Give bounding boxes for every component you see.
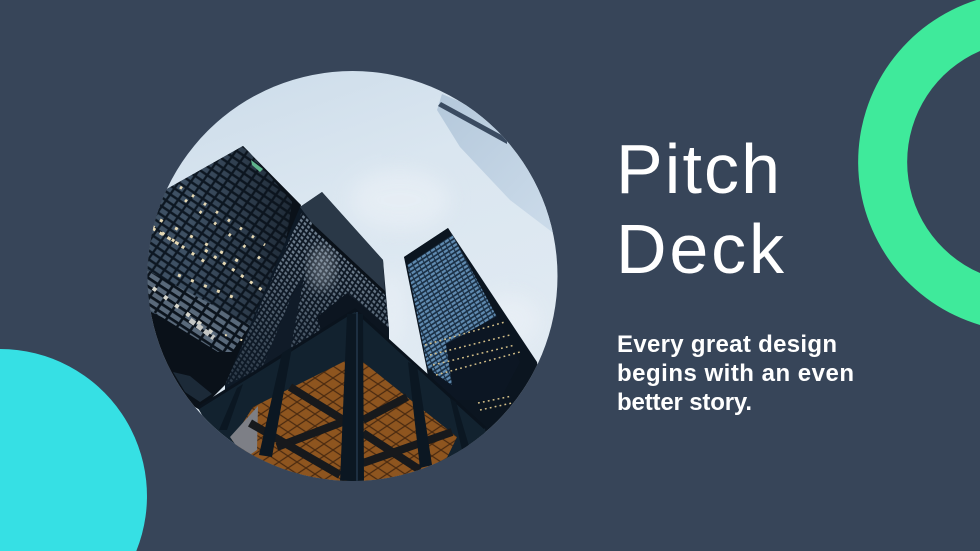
lit windows (152, 187, 265, 345)
tagline line 2: begins with an even (617, 360, 854, 387)
reflection pane (230, 406, 258, 458)
clouds (360, 177, 520, 328)
tagline line 3: better story. (617, 389, 752, 416)
tagline line 1: Every great design (617, 331, 837, 358)
title (616, 130, 785, 288)
ceiling beams (250, 387, 452, 475)
orange lit ceiling left (232, 360, 347, 482)
sky (147, 71, 558, 482)
lit windows (425, 322, 520, 410)
far glass tower (437, 94, 553, 232)
glass pavilion in foreground (198, 310, 490, 482)
right tower (404, 228, 538, 462)
orange lit ceiling right (363, 362, 457, 482)
circular photo of skyscrapers (140, 71, 575, 500)
left dark tower (140, 146, 301, 410)
decorative green ring (858, 0, 980, 325)
steel columns (219, 312, 469, 482)
roof band edges (198, 310, 485, 428)
title line 2: Deck (616, 210, 785, 288)
central tower (225, 192, 389, 400)
tagline (617, 331, 854, 416)
decorative cyan circle (0, 349, 147, 551)
title line 1: Pitch (616, 130, 780, 208)
